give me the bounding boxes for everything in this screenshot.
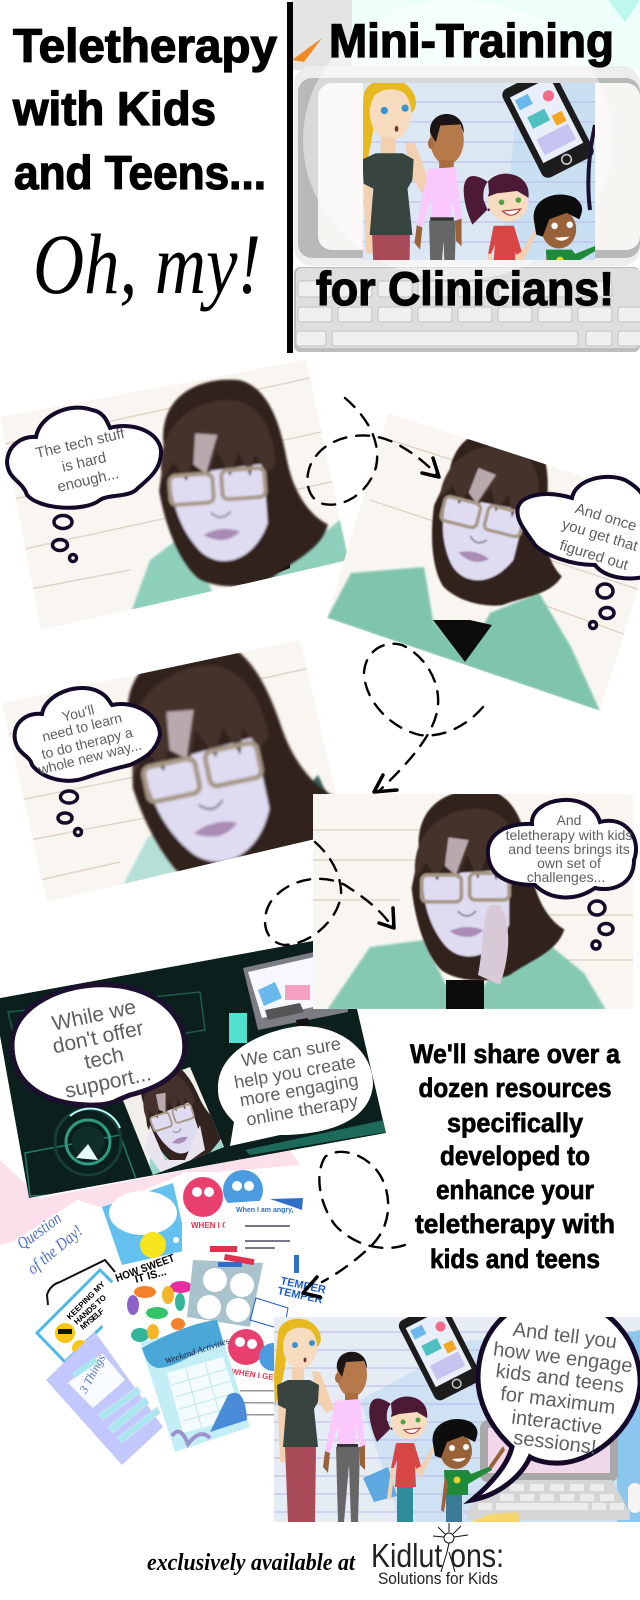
- speech bubble: engage kids: interactive: [510, 1407, 603, 1439]
- speech bubble: engage kids: [472, 1298, 640, 1500]
- laptop: [467, 1420, 640, 1520]
- panel: photo 2: [327, 413, 640, 711]
- thought bubble 3: to do therapy a: [40, 724, 134, 762]
- thought bubble 3: [15, 688, 160, 836]
- sheet: keeping my hands to myself: MYSELF: [79, 1307, 106, 1332]
- sheet: thought cloud: [102, 1183, 188, 1265]
- sheet: angry faces: WHEN I GET: [191, 1221, 239, 1230]
- header illustration: [363, 83, 595, 260]
- sheet: when I get angry lower: WHEN I GET ANGRY: [231, 1367, 310, 1387]
- thought bubble 3: need to learn: [40, 709, 124, 745]
- thought bubble 4: And: [557, 812, 581, 828]
- thought bubble 1: [7, 408, 161, 562]
- text block: resources: enhance your: [436, 1175, 594, 1205]
- text block: resources: specifically: [447, 1108, 583, 1138]
- thought bubble 4: [488, 800, 636, 949]
- speech bubble: engaging therapy: online therapy: [245, 1090, 359, 1130]
- panel: character illustration: [274, 1298, 640, 1522]
- arrow: dashed loop 2: [364, 644, 483, 792]
- speech bubble: tech support: support...: [63, 1062, 153, 1103]
- thought bubble 1: is hard: [60, 449, 108, 476]
- logo: Kidlutions: Solutions for Kids: [378, 1569, 498, 1588]
- title: Teletherapy with Kids and Teens: and Teens...: [14, 146, 266, 199]
- monitor: [243, 952, 348, 1030]
- text block: resources: teletherapy with: [415, 1209, 615, 1239]
- sheet: keeping my hands to myself: [37, 1260, 130, 1362]
- thought bubble 4: and teens brings its: [508, 841, 630, 857]
- divider line: [287, 2, 293, 353]
- speech bubble: engage kids: kids and teens: [495, 1360, 625, 1398]
- sheet: 3 things: 3 Things: [76, 1352, 108, 1396]
- sheet: temper temper: TEMPER: [276, 1285, 324, 1306]
- gauge: [55, 1109, 121, 1175]
- thought bubble 1: The tech stuff: [34, 425, 127, 462]
- thought bubble 4: teletherapy with kids: [506, 827, 632, 843]
- title: Teletherapy with Kids and Teens: [12, 19, 277, 199]
- speech bubble: tech support: While we: [50, 995, 138, 1036]
- thought bubble 3: You'll: [60, 701, 96, 725]
- text block: resources: developed to: [440, 1141, 590, 1171]
- sheet: keeping my hands to myself: KEEPING MY: [65, 1279, 107, 1321]
- speech bubble: engage kids: how we engage: [492, 1339, 634, 1377]
- arrow: dashed loop 4: [303, 1152, 405, 1297]
- sheet: when I get angry lower: [227, 1327, 310, 1443]
- text block: resources: kids and teens: [430, 1244, 600, 1274]
- thought bubble 4: own set of: [537, 855, 601, 871]
- thought bubble 2: you get that: [560, 516, 640, 555]
- title: Teletherapy with Kids and Teens: with Kids: [12, 82, 216, 135]
- speech bubble: engaging therapy: [218, 1026, 373, 1146]
- speech bubble: tech support: don't offer: [51, 1017, 146, 1058]
- thought bubble 3: whole new way...: [36, 736, 143, 778]
- speech bubble: engage kids: for maximum: [499, 1383, 617, 1419]
- speech bubble: engaging therapy: help you create: [233, 1051, 357, 1093]
- sheet: how sweet it is: IT IS...: [134, 1266, 168, 1286]
- sheet: angry faces: [182, 1170, 263, 1262]
- sheet: weekend activities: Weekend Activities: [164, 1335, 231, 1366]
- text block: resources: [410, 1039, 621, 1274]
- panel: resource collage: [0, 1170, 330, 1465]
- sheet: when I am angry: When I am angry,: [236, 1207, 293, 1214]
- thought bubble 2: figured out: [557, 537, 631, 574]
- panel: photo 1: [0, 360, 349, 630]
- sheet: how sweet it is: HOW SWEET: [114, 1252, 177, 1285]
- text block: resources: dozen resources: [418, 1073, 612, 1103]
- thought bubble 4: challenges...: [527, 869, 605, 885]
- title: Mini-Training: Mini-Training: [329, 14, 614, 67]
- speech bubble: engaging therapy: more engaging: [238, 1070, 360, 1110]
- speech bubble: engage kids: sessions!: [512, 1427, 598, 1459]
- arrow: dashed loop 3: [265, 842, 394, 945]
- sheet: temper temper: TEMPER: [279, 1275, 327, 1296]
- title: Teletherapy with Kids and Teens: Teletherapy: [13, 19, 277, 72]
- speech bubble: engaging therapy: We can sure: [240, 1033, 342, 1071]
- sheet: weekend activities: [140, 1320, 250, 1452]
- thought bubble 2: [517, 477, 640, 628]
- logo: Kidlutions: Kidlut ons:: [371, 1537, 504, 1574]
- arrow: dashed loop 1: [307, 398, 439, 505]
- panel: photo 4: [313, 790, 636, 1010]
- script heading: Oh, my!: Oh, my!: [33, 216, 261, 312]
- speech bubble: tech support: [12, 985, 185, 1105]
- thought bubble 2: And once: [573, 500, 639, 535]
- text block: resources: We'll share over a: [410, 1039, 621, 1069]
- speech bubble: engage kids: And tell you: [512, 1319, 618, 1353]
- sheet: four circles: [187, 1246, 263, 1327]
- title: for Clinicians: for Clinicians!: [316, 262, 614, 315]
- panel: photo 3: [2, 640, 336, 902]
- logo: Kidlutions: [371, 1523, 504, 1588]
- panel: pink brush background: [0, 1150, 300, 1245]
- sheet: when I am angry: [223, 1198, 303, 1273]
- small photo: [123, 1067, 224, 1175]
- speech bubble: tech support: tech: [82, 1043, 126, 1074]
- thought bubble 1: enough...: [56, 465, 121, 496]
- sheet: question of the day: [0, 1200, 120, 1300]
- footer: exclusively available: exclusively available at: [147, 1550, 356, 1576]
- panel: header laptop image: [292, 0, 640, 352]
- panel: dark tech panel: [0, 936, 386, 1198]
- sheet: question of the day: of the Day!: [23, 1221, 86, 1278]
- sheet: temper temper: [248, 1270, 330, 1350]
- sheet: keeping my hands to myself: HANDS TO: [72, 1293, 108, 1326]
- sheet: how sweet it is: [100, 1252, 200, 1400]
- sheet: 3 things: [46, 1332, 163, 1465]
- sheet: question of the day: Question: [13, 1208, 65, 1253]
- keyboard: [294, 267, 640, 352]
